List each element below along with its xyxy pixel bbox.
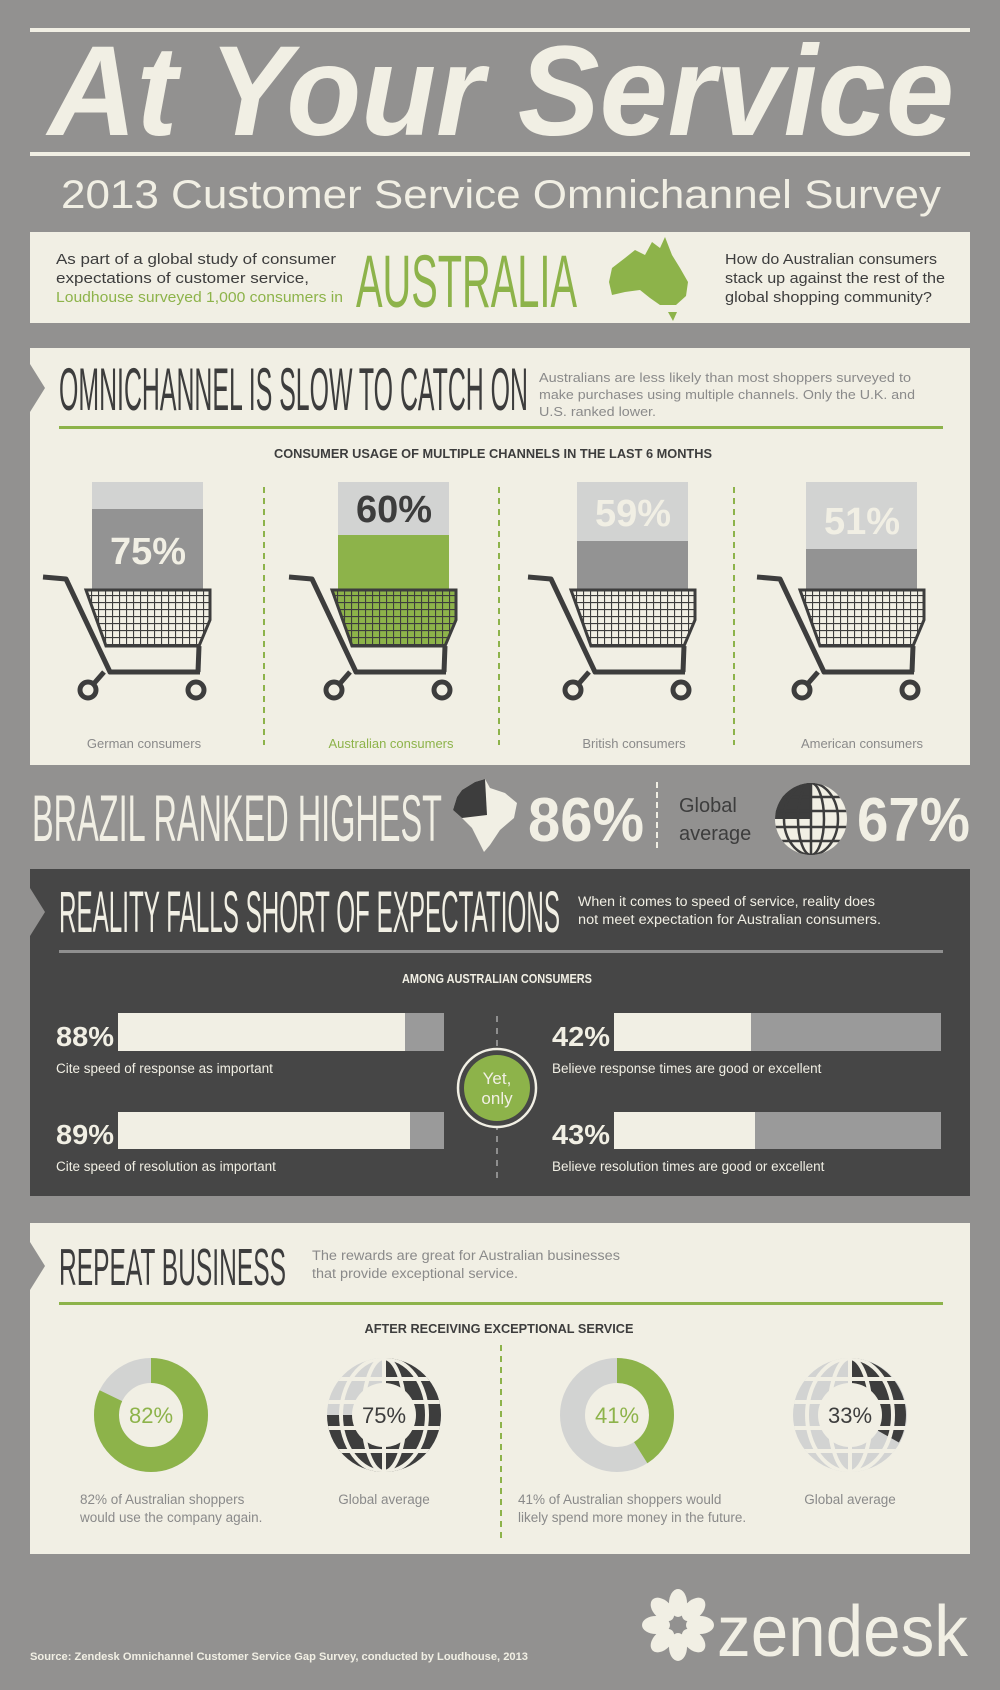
globe: 33%: 33% [828,1403,872,1428]
brazil row: average [679,823,751,845]
donut: 41%: 41% [595,1403,639,1428]
panel: repeat business: AFTER RECEIVING EXCEPTIONAL SERVICE [364,1322,634,1336]
brazil row: BRAZIL RANKED HIGHEST [32,781,442,855]
bar: 89%: Cite speed of resolution as important [56,1159,276,1174]
callout: yet only: only [481,1089,513,1108]
cart: australian 60%: Australian consumers [328,736,454,751]
bar: 89%: 89% [56,1119,114,1150]
globe: 75% [324,1355,444,1475]
bar: 88%: Cite speed of response as important [56,1061,273,1076]
captions: would use the company again. [79,1510,262,1525]
description: make purchases using multiple channels. Only the U.K. and [539,387,915,402]
intro text right: stack up against the rest of the [725,270,945,287]
cart: american 51%: 51% [824,501,900,543]
intro text right [725,251,945,306]
panel: intro [30,232,970,323]
description: U.S. ranked lower. [539,404,656,419]
captions: 82% of Australian shoppers [80,1492,245,1507]
brazil row: 86% [528,786,644,855]
donut: 82%: 82% [129,1403,173,1428]
globe: 33% [790,1355,910,1475]
bar: 88%: 88% [56,1021,114,1052]
globe: 75%: 75% [362,1403,406,1428]
intro text right: global shopping community? [725,289,932,306]
cart: american 51% [757,482,924,751]
cart: british 59%: 59% [595,493,671,535]
chart subheading: CONSUMER USAGE OF MULTIPLE CHANNELS IN THE LAST 6 MONTHS [274,447,712,461]
intro text left: Loudhouse surveyed 1,000 consumers in [56,289,343,306]
panel: reality falls short: When it comes to speed of service, reality does [578,894,875,909]
icon: australia map [609,237,688,321]
cart: british 59% [528,482,695,751]
bar: 89% [56,1112,444,1174]
captions [79,1492,896,1525]
intro text left [56,251,343,306]
cart: german 75%: German consumers [87,736,202,751]
cart: australian 60%: 60% [356,489,432,531]
callout: yet only [458,1049,536,1127]
brazil row: 67% [857,786,970,855]
panel: omnichannel [30,348,970,765]
cart: british 59%: British consumers [582,736,686,751]
captions: Global average [338,1492,430,1507]
description: Australians are less likely than most shoppers surveyed to [539,370,911,385]
source: Source: Zendesk Omnichannel Customer Service Gap Survey, conducted by Loudhouse, 2013 [30,1651,528,1663]
donut: 41% [572,1370,662,1460]
title: At Your Service [45,20,954,163]
bar: 43%: Believe resolution times are good or excellent [552,1159,825,1174]
panel: reality falls short: AMONG AUSTRALIAN CONSUMERS [402,972,592,986]
panel: reality falls short [30,869,970,1196]
callout: yet only: Yet, [483,1069,511,1088]
captions: Global average [804,1492,896,1507]
panel: repeat business [30,1223,970,1554]
bar: 42%: 42% [552,1021,610,1052]
bar: 42% [552,1013,941,1076]
cart: german 75% [43,482,210,751]
intro text right: How do Australian consumers [725,251,937,268]
logo: zendesk: zendesk [717,1592,969,1672]
subtitle: 2013 Customer Service Omnichannel Survey [61,173,941,217]
description [539,370,915,419]
captions: likely spend more money in the future. [518,1510,746,1525]
heading: australia: AUSTRALIA [356,240,577,323]
cart: german 75%: 75% [110,531,186,573]
bar: 43%: 43% [552,1119,610,1150]
bar: 42%: Believe response times are good or excellent [552,1061,822,1076]
donut: 82% [106,1370,196,1460]
panel: repeat business: that provide exceptional service. [312,1266,518,1281]
intro text left: As part of a global study of consumer [56,251,336,268]
panel: repeat business: The rewards are great for Australian businesses [312,1248,620,1263]
icon: globe 67% [775,783,847,855]
panel: repeat business: REPEAT BUSINESS [59,1239,286,1297]
captions: 41% of Australian shoppers would [518,1492,721,1507]
bar: 43% [552,1112,941,1174]
intro text left: expectations of customer service, [56,270,309,287]
bar: 88% [56,1013,444,1076]
icon: brazil map [453,779,517,852]
cart: australian 60% [289,482,456,751]
panel: reality falls short: not meet expectation for Australian consumers. [578,912,881,927]
cart: american 51%: American consumers [801,736,924,751]
brazil row: Global [679,795,737,817]
